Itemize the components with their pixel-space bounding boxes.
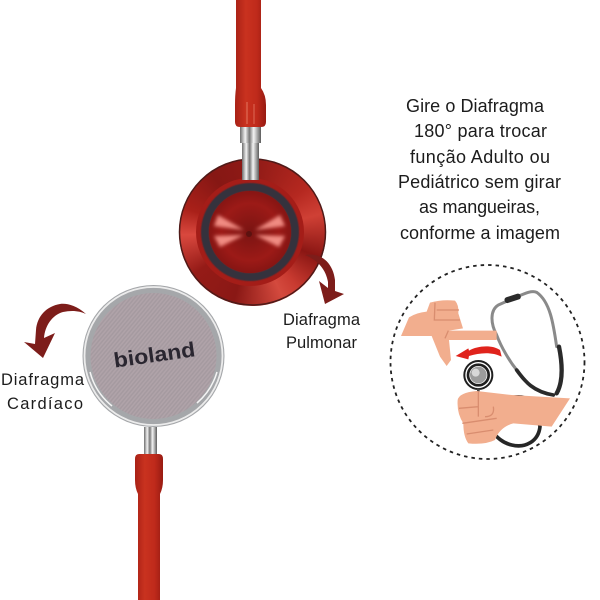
icon: lower hand [458, 391, 570, 444]
top metal stem [240, 127, 261, 180]
label: Diafragma Cardíaco: Diafragma [1, 371, 85, 389]
label: Diafragma Pulmonar: Diafragma [283, 311, 361, 329]
instruction text: 180° para trocar [414, 121, 547, 141]
label: Diafragma Pulmonar: Pulmonar [286, 334, 358, 352]
instruction text: Pediátrico sem girar [398, 172, 561, 192]
label: Diafragma Cardíaco: Cardíaco [7, 395, 83, 413]
bottom stethoscope tube [135, 454, 163, 600]
instruction text: função Adulto ou [410, 147, 550, 167]
dashed circle [390, 265, 584, 459]
icon: red rotation arrow [456, 346, 502, 359]
instruction text: as mangueiras, [419, 197, 540, 217]
instruction text: Gire o Diafragma [406, 96, 545, 116]
bottom metal stem [144, 427, 157, 455]
instruction text [398, 96, 561, 243]
icon: chest piece [464, 361, 492, 395]
top stethoscope tube [235, 0, 266, 127]
silver cardiac diaphragm head [82, 285, 224, 427]
icon: ear tips [504, 293, 522, 304]
label: Diafragma Pulmonar [283, 311, 361, 352]
label: Diafragma Cardíaco [1, 371, 85, 413]
illustration: rotating the diaphragm [401, 292, 570, 446]
curved arrow: cardiac [24, 304, 86, 358]
curved arrow: pulmonary [305, 254, 344, 304]
icon: stethoscope tubes [491, 292, 562, 446]
red pulmonary diaphragm head [179, 158, 326, 306]
brand name: bioland: bioland [112, 338, 197, 373]
icon: upper hand [401, 300, 497, 366]
instruction text: conforme a imagem [400, 223, 560, 243]
